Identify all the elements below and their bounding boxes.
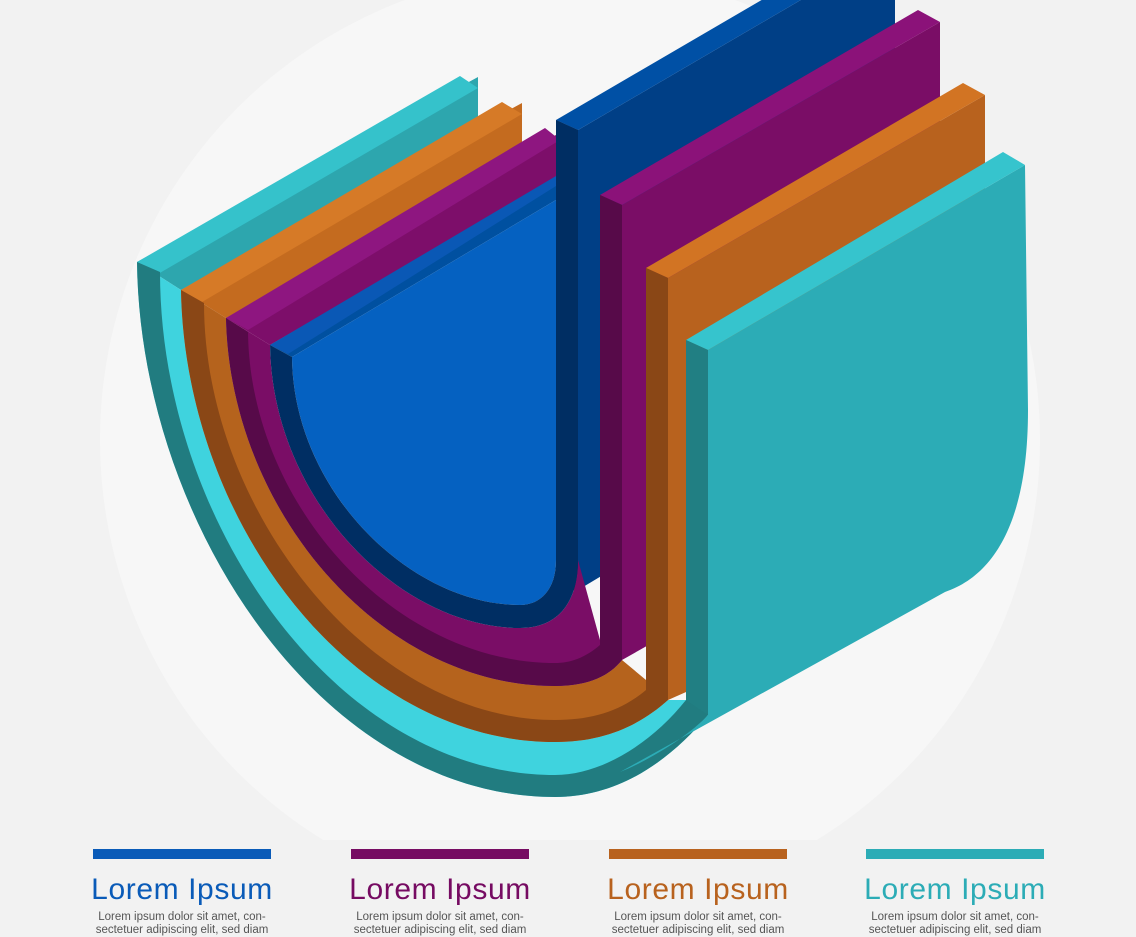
panel: orange: [646, 83, 985, 700]
legend item 2: Lorem Ipsum: [349, 873, 531, 906]
legend item 1: Lorem Ipsum: [91, 873, 273, 906]
legend item 4: Lorem Ipsum: [864, 873, 1046, 906]
legend item 2: Lorem ipsum dolor sit amet, con-: [356, 911, 524, 923]
left slabs: [137, 76, 560, 357]
legend item 2: [349, 849, 531, 936]
U band: purple: [226, 195, 622, 686]
legend item 2: sectetuer adipiscing elit, sed diam: [354, 924, 526, 936]
panel: purple: [600, 10, 940, 660]
panel: blue: [556, 0, 895, 590]
legend item 4: Lorem ipsum dolor sit amet, con-: [871, 911, 1039, 923]
U band: blue: [270, 120, 578, 628]
U band: teal: [137, 262, 708, 797]
legend item 3: sectetuer adipiscing elit, sed diam: [612, 924, 784, 936]
legend item 4: [864, 849, 1046, 936]
legend item 1: [91, 849, 273, 936]
legend item 3: [607, 849, 789, 936]
legend item 4: sectetuer adipiscing elit, sed diam: [869, 924, 1041, 936]
U band: orange: [181, 268, 668, 742]
legend item 3: Lorem Ipsum: [607, 873, 789, 906]
panel: teal: [620, 152, 1028, 772]
legend item 1: sectetuer adipiscing elit, sed diam: [96, 924, 268, 936]
legend item 3: Lorem ipsum dolor sit amet, con-: [614, 911, 782, 923]
legend item 1: Lorem ipsum dolor sit amet, con-: [98, 911, 266, 923]
